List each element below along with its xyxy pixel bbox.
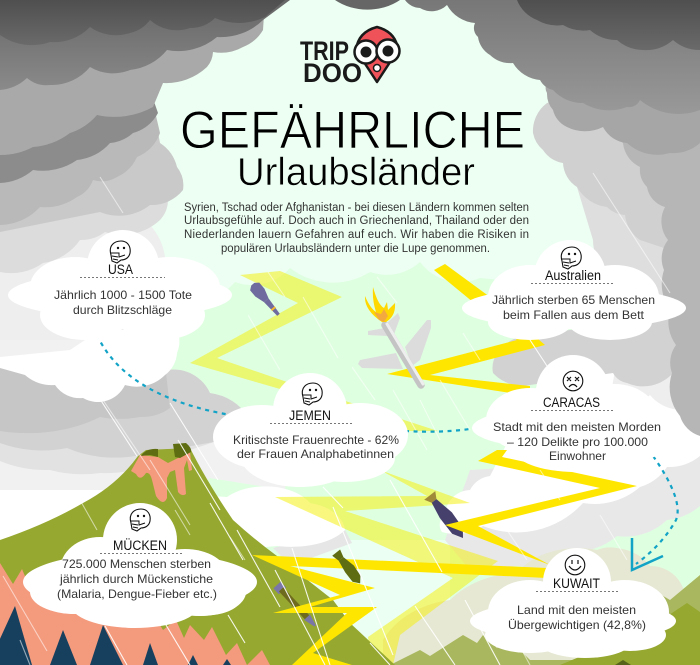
description — [493, 420, 661, 463]
cloud shape — [23, 503, 257, 628]
icon: smiley — [565, 555, 585, 575]
description: Kritischste Frauenrechte - 62% — [233, 433, 399, 447]
description — [233, 433, 399, 461]
heading: MÜCKEN — [113, 538, 167, 553]
gray cloud strip: below white cloud — [273, 530, 352, 562]
cloud shape — [470, 548, 676, 658]
description: 725.000 Menschen sterben — [62, 557, 211, 571]
logo wordmark: TRIP — [300, 36, 349, 66]
logo pin — [354, 27, 400, 82]
intro text — [184, 202, 529, 255]
description: beim Fallen aus dem Bett — [503, 308, 645, 322]
subtitle: Urlaubsländer — [237, 151, 475, 194]
heading: KUWAIT — [553, 576, 600, 591]
lightning bolt: top right — [387, 264, 545, 396]
mountains: right — [390, 575, 700, 665]
description — [508, 603, 646, 632]
title: GEFÄHRLICHE — [180, 101, 525, 160]
callout: USA — [8, 230, 232, 340]
intro text: populären Urlaubsländern unter die Lupe genommen. — [221, 243, 490, 255]
bomb: green — [332, 549, 365, 586]
icon: thinking face — [130, 509, 150, 531]
dotted arrow: USA to Jemen — [97, 335, 250, 418]
logo: TripDoo — [300, 27, 400, 88]
heading: USA — [108, 262, 133, 277]
dotted arrow: Caracas to Kuwait — [636, 456, 678, 564]
logo wordmark — [300, 36, 362, 88]
description: Jährlich 1000 - 1500 Tote — [54, 288, 192, 302]
bomb: navy — [424, 491, 469, 542]
description: Land mit den meisten — [517, 603, 636, 617]
callout: Caracas — [472, 355, 672, 472]
icon: thinking face — [561, 247, 581, 269]
lightning bolt: bottom — [252, 555, 547, 665]
arrow head — [632, 538, 663, 570]
callout: Jemen — [213, 373, 408, 487]
description — [492, 293, 655, 322]
heading: Australien — [545, 268, 601, 283]
callout: Mücken — [23, 503, 257, 628]
dark blue trees — [0, 606, 231, 665]
description: der Frauen Analphabetinnen — [237, 447, 394, 461]
pale lightning bolts — [190, 271, 498, 665]
description: durch Blitzschläge — [73, 303, 172, 317]
cloud shape — [8, 230, 232, 340]
dotted arrow: Jemen to Caracas — [405, 429, 470, 432]
description: Jährlich sterben 65 Menschen — [492, 293, 655, 307]
white cloud: behind volcano — [0, 486, 345, 560]
callout: Australien — [462, 240, 686, 340]
description: – 120 Delikte pro 100.000 — [507, 435, 648, 449]
missile: purple — [248, 280, 283, 319]
description — [54, 288, 192, 317]
bomb: olive and purple — [273, 582, 319, 629]
icon: dead face — [563, 371, 583, 391]
storm clouds: left — [0, 0, 400, 345]
intro text: Niederlanden lauern Gefahren auf euch. Wir haben die Risiken in — [184, 229, 529, 241]
logo wordmark: DOO — [303, 58, 362, 88]
beige hill: Kuwait — [383, 547, 686, 665]
callout: Kuwait — [470, 548, 676, 658]
icon: thinking face — [302, 383, 322, 405]
description: (Malaria, Dengue-Fieber etc.) — [57, 587, 217, 601]
storm clouds: right — [405, 0, 700, 570]
intro text: Urlaubsgefühle auf. Doch auch in Griechenland, Thailand oder den — [184, 215, 529, 227]
rain — [3, 173, 670, 665]
cloud shape — [472, 355, 672, 472]
volcano lava — [131, 452, 192, 502]
white cloud: behind USA callout — [0, 330, 179, 402]
description: jährlich durch Mückenstiche — [59, 572, 213, 586]
heading: CARACAS — [543, 395, 600, 410]
plane flames — [365, 287, 395, 322]
lightning bolt: centre right — [445, 450, 637, 565]
storm clouds: lower left band — [0, 340, 290, 497]
salmon foothills — [0, 563, 270, 665]
cloud shape — [462, 240, 686, 340]
heading: JEMEN — [289, 408, 331, 423]
cloud shape — [213, 373, 408, 487]
plane — [358, 287, 431, 385]
description: Einwohner — [549, 449, 606, 463]
volcano — [0, 448, 395, 665]
description: Stadt mit den meisten Morden — [493, 420, 661, 434]
icon: thinking face — [110, 241, 130, 263]
intro text: Syrien, Tschad oder Afghanistan - bei diesen Ländern kommen selten — [184, 202, 529, 214]
volcano crater — [141, 443, 191, 458]
description — [57, 557, 217, 601]
description: Übergewichtigen (42,8%) — [508, 618, 646, 632]
